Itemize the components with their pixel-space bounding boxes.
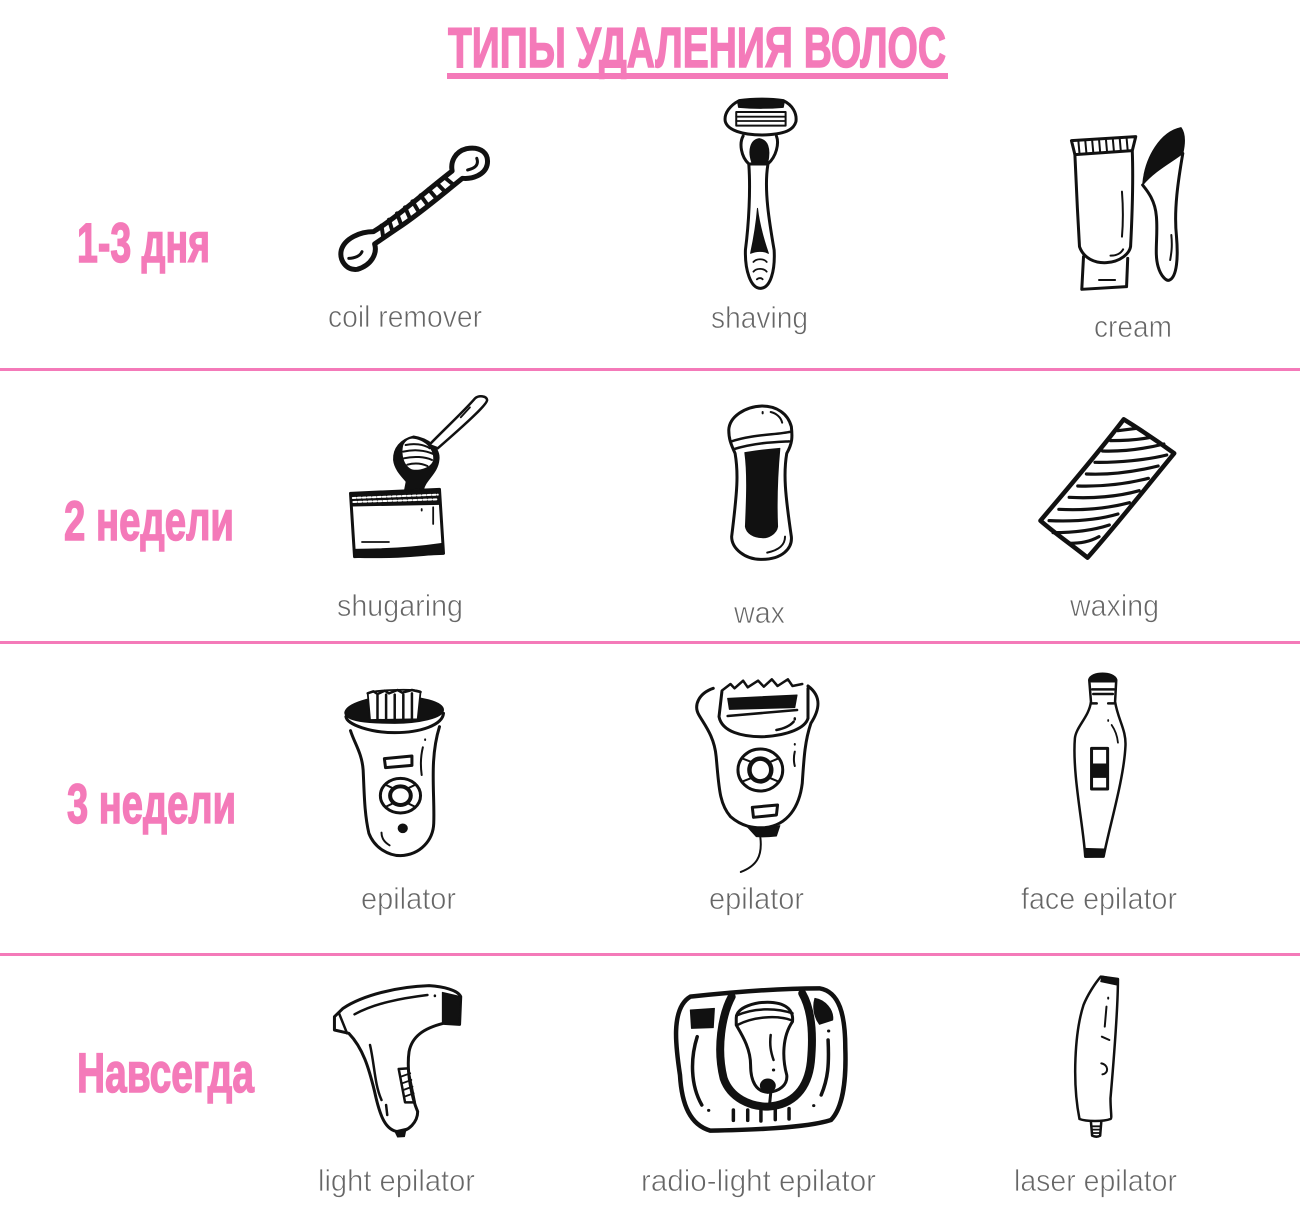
icon: laser epilator: [1075, 976, 1118, 1137]
icon: wax strip: [1040, 419, 1174, 558]
label: face epilator: face epilator: [1021, 881, 1177, 916]
icon: sugaring jar with dipper: [351, 396, 487, 558]
label: shaving: shaving: [711, 300, 808, 335]
row heading: 1-3 days: 1-3 дня: [77, 211, 210, 274]
icon: razor: [725, 99, 796, 288]
icon: wax roller: [729, 406, 792, 559]
icon: cream tube and spatula: [1071, 128, 1184, 289]
label: laser epilator: laser epilator: [1014, 1163, 1177, 1198]
label: light epilator: light epilator: [318, 1163, 475, 1198]
icon: radio-light epilator: [676, 988, 845, 1131]
label: epilator: epilator: [709, 881, 804, 916]
panel: row permanent: [77, 976, 1177, 1198]
title: ТИПЫ УДАЛЕНИЯ ВОЛОС: [448, 16, 946, 80]
title: [447, 16, 948, 80]
label: epilator: epilator: [361, 881, 456, 916]
label: waxing: waxing: [1069, 588, 1159, 623]
icon: coil remover: [341, 148, 487, 269]
icon: epilator round head: [345, 690, 444, 856]
panel: row 2 weeks: [64, 396, 1174, 630]
icon: light epilator: [334, 986, 461, 1137]
row heading: permanent: Навсегда: [77, 1041, 255, 1104]
label: coil remover: coil remover: [328, 299, 482, 334]
row heading: 3 weeks: 3 недели: [67, 772, 236, 835]
label: wax: wax: [733, 595, 785, 630]
panel: row 1-3 days: [77, 99, 1184, 344]
icon: epilator with cord: [697, 679, 818, 872]
icon: face epilator: [1074, 674, 1126, 857]
label: shugaring: shugaring: [337, 588, 463, 623]
panel: row 3 weeks: [67, 674, 1177, 916]
label: cream: cream: [1094, 309, 1172, 344]
label: radio-light epilator: radio-light epilator: [641, 1163, 876, 1198]
row heading: 2 weeks: 2 недели: [64, 489, 234, 552]
